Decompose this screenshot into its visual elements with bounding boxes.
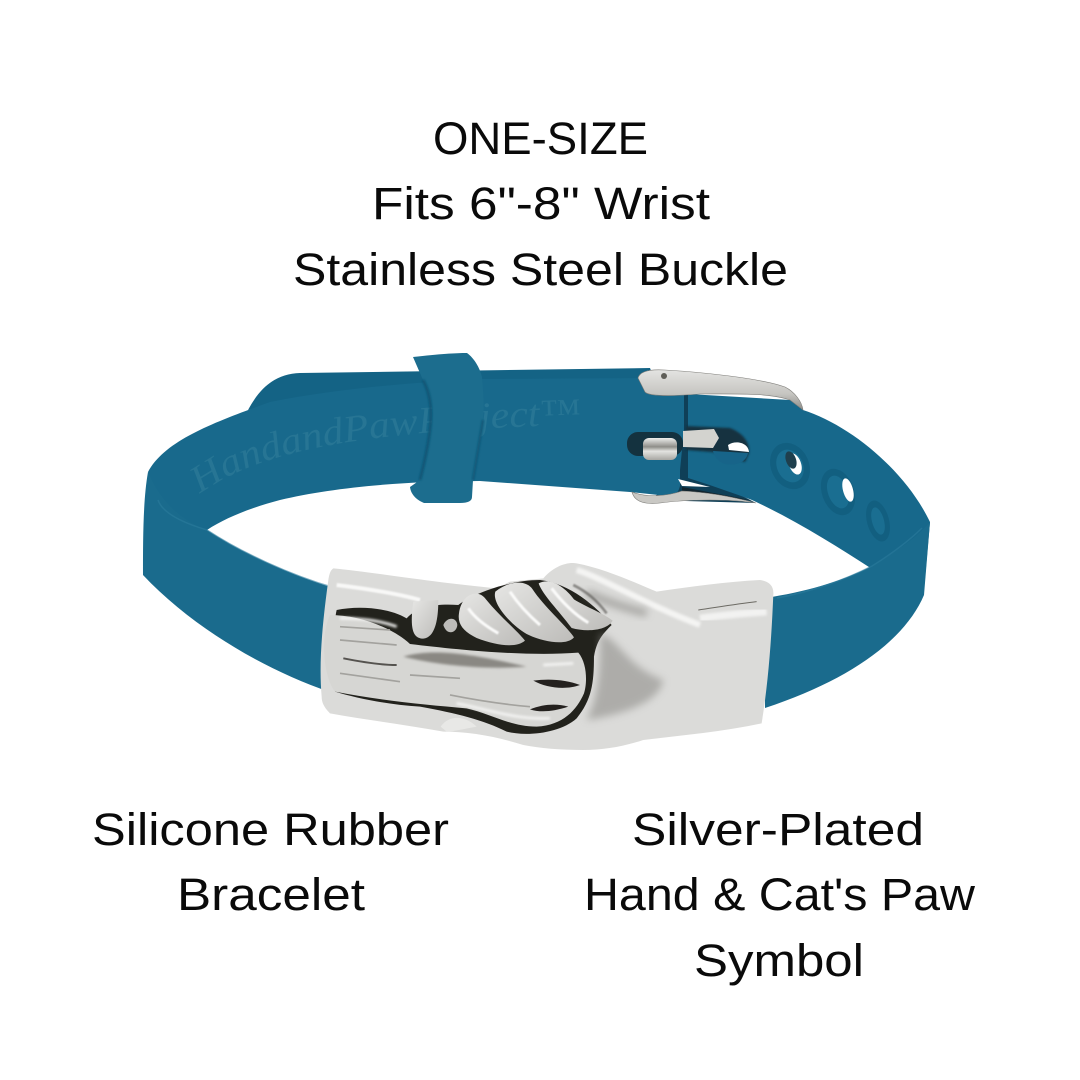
palm speckled shading bbox=[587, 633, 663, 720]
dark backing seen through buckle gap bbox=[650, 392, 756, 503]
buckle top plate bbox=[638, 370, 803, 410]
hand fingers bbox=[412, 581, 613, 645]
heading: size and buckle specs: ONE-SIZE bbox=[433, 113, 648, 164]
band front right bbox=[765, 522, 930, 708]
label: silver-plated symbol: Symbol bbox=[694, 935, 864, 986]
plate edge highlights bbox=[337, 585, 420, 600]
band inner surface, left and back bbox=[148, 378, 684, 530]
adjustment holes bbox=[763, 436, 894, 544]
paw fur shading bbox=[403, 653, 527, 668]
slot in right strap bbox=[686, 426, 749, 462]
bracelet photo illustration bbox=[142, 353, 930, 750]
strap tongue through the slot bbox=[713, 451, 748, 465]
buckle lower plate bbox=[632, 491, 756, 503]
heading: size and buckle specs bbox=[293, 113, 788, 295]
label: silver-plated symbol: Hand & Cat's Paw bbox=[584, 869, 976, 920]
buckle pin bbox=[643, 429, 719, 460]
silver hand and cat's paw charm bbox=[321, 563, 773, 750]
thumb tip below paw bbox=[441, 718, 477, 732]
label: silver-plated symbol: Silver-Plated bbox=[632, 804, 924, 855]
hand back contour highlight bbox=[577, 570, 700, 625]
cat's paw bbox=[324, 615, 586, 727]
dark recess around paw bbox=[335, 580, 612, 734]
label: silicone rubber bracelet: Silicone Rubber bbox=[92, 804, 449, 855]
buckle bbox=[627, 370, 803, 503]
charm base bbox=[321, 563, 773, 750]
label: silicone rubber bracelet bbox=[92, 804, 449, 920]
heading: size and buckle specs: Stainless Steel Buckle bbox=[293, 244, 788, 295]
white gap in slot bbox=[728, 442, 749, 452]
slot in left strap bbox=[627, 432, 683, 456]
keeper loop bbox=[410, 353, 484, 503]
label: silver-plated symbol bbox=[584, 804, 976, 986]
label: silicone rubber bracelet: Bracelet bbox=[177, 869, 366, 920]
rim highlights bbox=[158, 500, 922, 598]
back strap top edge bbox=[248, 368, 660, 410]
band front left bbox=[143, 472, 340, 692]
band inner surface, right with adjustment holes bbox=[688, 394, 930, 590]
embossed wordmark: HandandPawProject™ bbox=[190, 400, 580, 494]
heading: size and buckle specs: Fits 6"-8" Wrist bbox=[372, 178, 711, 229]
shadow under strap near lower buckle plate bbox=[682, 487, 750, 500]
